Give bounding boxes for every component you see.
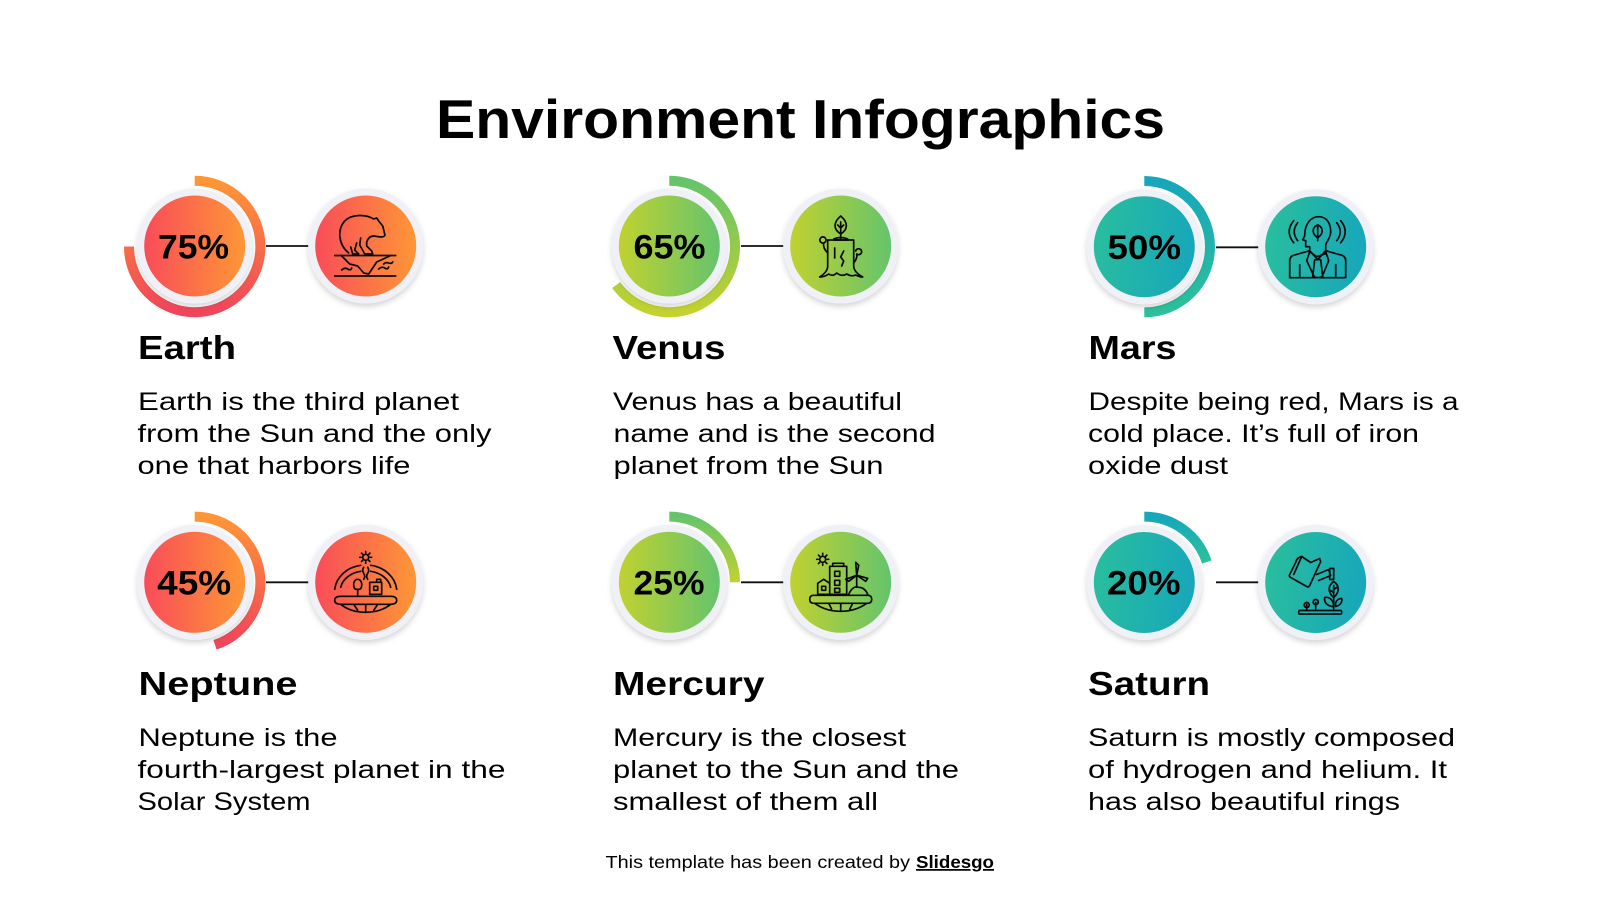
percent badge: Venus: 65% [634,228,706,266]
progress ring: Earth 75% [129,181,260,312]
text block: Saturn: of hydrogen and helium. It [1088,756,1447,784]
text block: Saturn: has also beautiful rings [1088,788,1400,816]
panel: Mars [1087,181,1459,480]
text block: Neptune: Solar System [138,788,310,816]
text block: Earth: from the Sun and the only [138,420,492,448]
text block: Mercury: Mercury is the closest [613,724,906,752]
text block: Mars: cold place. It’s full of iron [1088,420,1419,448]
text block: Earth: one that harbors life [138,452,410,480]
text block: Venus: Venus has a beautiful [613,388,902,416]
percent badge: Saturn: 20% [1107,564,1180,602]
connector [266,245,309,247]
progress ring: Saturn 20% [1144,517,1207,562]
connector [266,581,309,583]
connector [741,581,784,583]
text block: Venus: name and is the second [614,420,936,448]
text block: Neptune: fourth-largest planet in the [138,756,506,784]
progress ring: Venus 65% [616,181,735,312]
percent badge: Mercury [612,525,727,640]
text block: Mercury [613,724,959,816]
heading: Neptune: Neptune [138,666,298,703]
footer credit: This template has been created by [606,852,910,872]
percent badge: Earth: 75% [158,228,229,266]
percent badge: Mars [1087,189,1202,304]
text block: Earth: Earth is the third planet [138,388,459,416]
panel: Mercury [612,517,959,816]
text block: Neptune: Neptune is the [138,724,338,752]
progress ring: Mars 50% [1144,181,1210,312]
text block: Mercury: smallest of them all [613,788,878,816]
connector [1216,581,1259,583]
progress ring: Mercury 25% [669,517,735,582]
text block: Venus: planet from the Sun [614,452,884,480]
text block: Neptune [138,724,506,816]
panel: Saturn [1087,517,1455,816]
icon: tree stump with sprout [783,188,898,304]
text block: Earth [138,388,492,480]
heading: Earth: Earth [138,330,236,367]
percent badge: Neptune [137,525,252,640]
progress ring: Neptune 45% [195,517,260,645]
heading: Saturn: Saturn [1088,666,1210,703]
heading: Venus: Venus [612,330,726,367]
icon: person with leaf in mind [1258,189,1373,304]
icon: dome over floating land [308,525,423,640]
connector [741,245,784,247]
percent badge: Venus [612,188,727,304]
percent badge: Earth [137,188,252,304]
text block: Venus [613,388,936,480]
footer credit: Slidesgo [916,852,994,872]
percent badge: Mars: 50% [1108,229,1181,267]
icon: watering can and plants [1258,525,1373,640]
percent badge: Neptune: 45% [157,564,231,602]
icon: green city on floating land [783,525,898,640]
panel: Neptune [137,517,505,816]
heading: Mars: Mars [1088,330,1176,367]
connector [1216,246,1259,248]
panel: Earth [129,181,492,480]
text block: Saturn: Saturn is mostly composed [1088,724,1455,752]
icon: polar bear on ice [308,188,423,304]
footer credit [606,852,994,872]
percent badge: Saturn [1087,525,1202,640]
text block: Mars [1088,388,1459,480]
text block: Mars: oxide dust [1088,452,1228,480]
text block: Mercury: planet to the Sun and the [613,756,959,784]
text block: Saturn [1088,724,1455,816]
percent badge: Mercury: 25% [634,564,704,602]
heading: Mercury: Mercury [613,666,765,703]
text block: Mars: Despite being red, Mars is a [1088,388,1459,416]
title: Environment Infographics [436,88,1165,150]
panel: Venus [612,181,936,480]
